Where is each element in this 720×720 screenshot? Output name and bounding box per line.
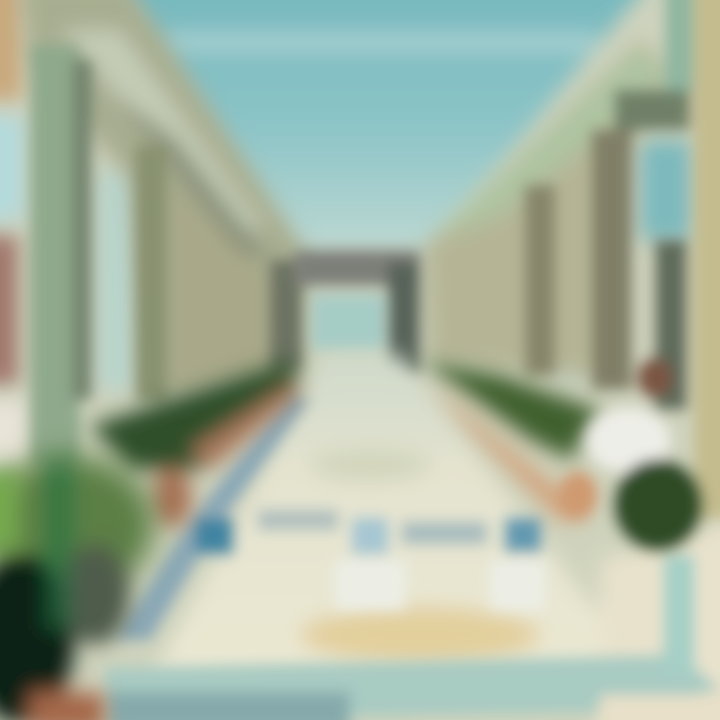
far archway [295,250,420,374]
left foreground bush [0,455,155,595]
left columns [30,45,302,465]
foreground frame [105,555,720,720]
furniture row [258,510,545,610]
floor [150,355,720,720]
planters right [420,360,600,520]
blue walkway edge [115,395,310,640]
planters left [90,360,300,528]
right columns [525,0,720,520]
left side sky gap [0,0,134,460]
right colonnade [425,40,680,380]
sky [105,0,660,250]
person at right [558,358,702,551]
bush shadow and pot [0,460,130,720]
left colonnade [20,0,305,400]
right sky gaps [555,140,692,380]
